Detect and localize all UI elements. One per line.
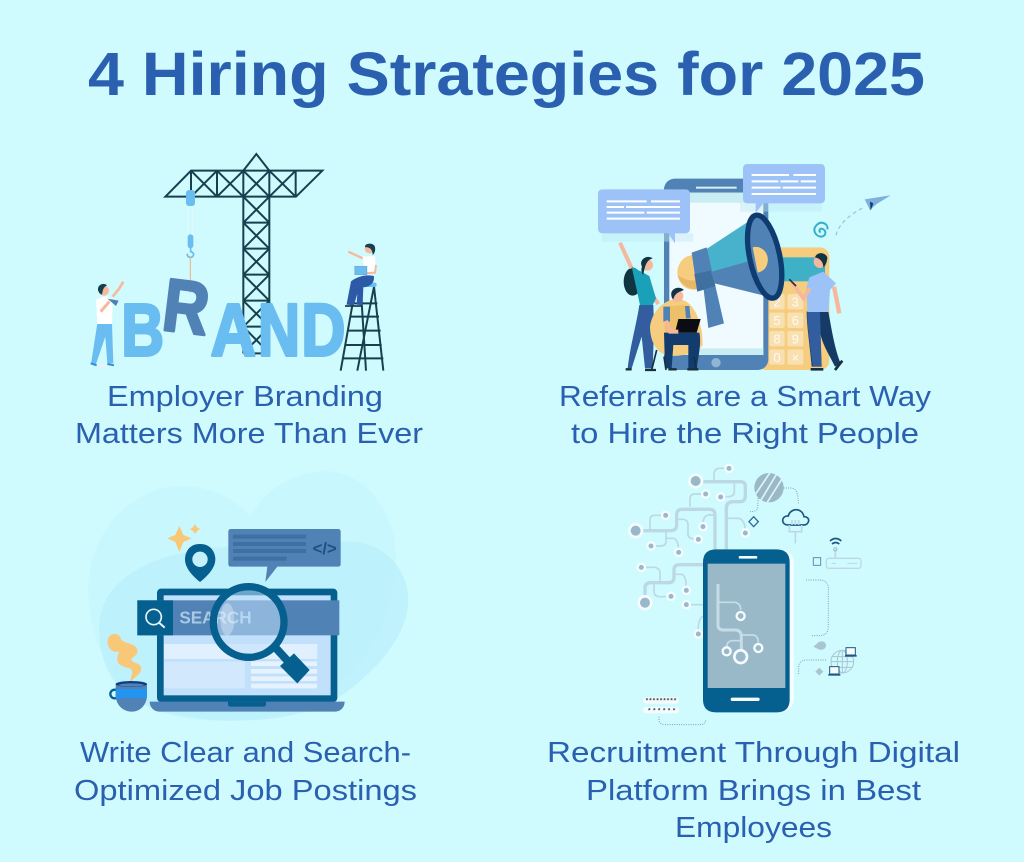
heading: job postings: Optimized Job Postings xyxy=(74,775,417,807)
circuit branches xyxy=(637,468,745,634)
ladder xyxy=(341,287,383,371)
crane tower xyxy=(165,154,322,353)
heading: digital recruitment: Recruitment Through Digital xyxy=(547,737,960,769)
calculator: 6 xyxy=(792,314,799,328)
code speech bubble: </> xyxy=(313,539,337,558)
heading: digital recruitment: Employees xyxy=(675,812,832,844)
word: BRAND xyxy=(121,263,345,371)
heading: referrals: to Hire the Right People xyxy=(571,418,919,450)
person on ladder xyxy=(345,244,377,306)
calculator: 3 xyxy=(792,296,799,310)
password fields: ********* xyxy=(646,698,677,705)
calculator: 2 xyxy=(773,296,781,310)
word: BRAND: B xyxy=(121,288,164,371)
man with phone xyxy=(789,253,842,370)
search bar xyxy=(137,600,339,635)
person with megaphone xyxy=(91,282,123,367)
calculator: 8 xyxy=(773,333,781,347)
speech bubble: right xyxy=(740,164,825,213)
search bar: SEARCH xyxy=(179,608,252,628)
heading: referrals: Referrals are a Smart Way xyxy=(559,381,932,413)
mobile phone xyxy=(703,549,794,712)
heading: digital recruitment xyxy=(547,737,960,844)
word: BRAND: N xyxy=(258,288,300,371)
heading: job postings xyxy=(74,737,417,807)
background blobs xyxy=(88,471,408,721)
paper plane xyxy=(814,195,891,237)
calculator xyxy=(757,247,829,370)
word: BRAND: D xyxy=(301,288,345,371)
heading: digital recruitment: Platform Brings in Best xyxy=(586,775,921,807)
wire globe with laptops xyxy=(828,648,857,676)
cloud shape and diamond xyxy=(813,641,826,676)
router with wifi xyxy=(813,538,861,568)
title: 4 Hiring Strategies for 2025 xyxy=(88,40,925,108)
password fields: ****** xyxy=(648,707,676,714)
heading: employer branding xyxy=(75,381,423,450)
illustration: referrals megaphone xyxy=(598,164,891,370)
illustration: brand crane xyxy=(91,154,383,371)
laptop xyxy=(150,589,345,712)
icon: diamond xyxy=(749,517,758,527)
heading: employer branding: Employer Branding xyxy=(107,381,383,413)
magnifying glass xyxy=(213,587,310,683)
speech bubble: left xyxy=(598,189,693,243)
man seated with laptop xyxy=(650,288,703,370)
dotted connectors xyxy=(659,580,828,725)
crane hook xyxy=(186,190,195,293)
heading: job postings: Write Clear and Search- xyxy=(80,737,411,769)
striped globe xyxy=(750,473,798,512)
code speech bubble xyxy=(228,529,341,582)
icon: location pin xyxy=(185,544,215,582)
calculator: 9 xyxy=(792,333,799,347)
calculator: 5 xyxy=(773,314,781,328)
coffee cup xyxy=(108,634,147,712)
smartphone xyxy=(664,179,768,370)
illustration: digital platform phone xyxy=(629,465,861,725)
heading: referrals xyxy=(559,381,932,450)
circuit nodes xyxy=(629,465,749,638)
phone circuit xyxy=(718,584,758,650)
word: BRAND: R xyxy=(159,263,214,351)
icon: cloud plug xyxy=(783,510,809,543)
megaphone xyxy=(677,212,788,328)
calculator: × xyxy=(792,351,799,365)
calculator: 0 xyxy=(773,351,781,365)
sparkles xyxy=(167,524,200,552)
word: BRAND: A xyxy=(211,288,256,371)
password fields xyxy=(643,697,679,714)
woman waving xyxy=(620,243,658,370)
illustration: job posting search xyxy=(88,471,408,721)
heading: employer branding: Matters More Than Ever xyxy=(75,418,423,450)
